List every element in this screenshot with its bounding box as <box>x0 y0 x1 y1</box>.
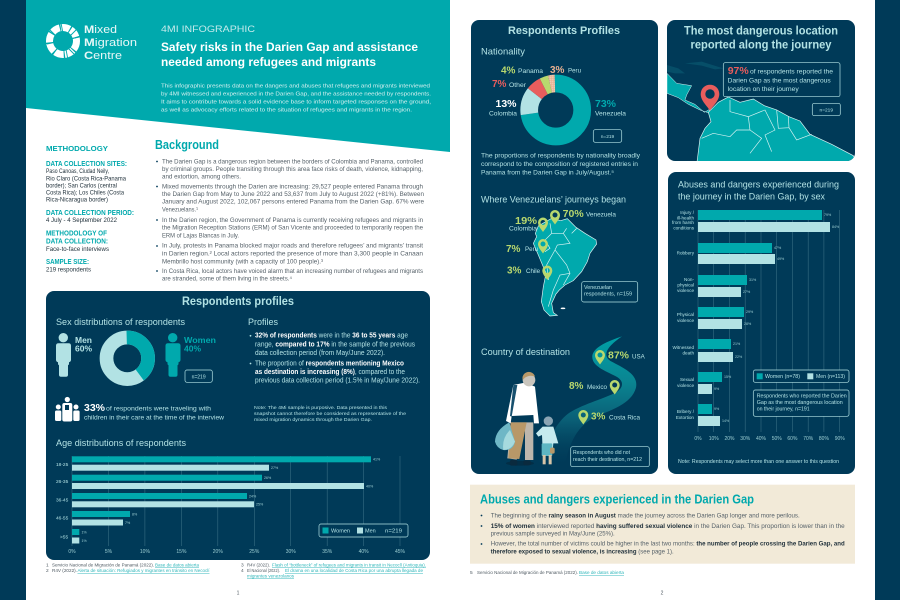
footnotes page 1: Alerta de situación: Refugiados y migrantes en tránsito en Necoclí <box>78 568 210 574</box>
methodology column: 219 respondents <box>46 268 91 274</box>
respondents note box <box>753 390 849 416</box>
age chart: 35% <box>322 549 333 555</box>
nationality <box>481 46 641 177</box>
callout: 97%: 97% <box>728 65 749 77</box>
age chart: 41% <box>373 458 381 462</box>
background section: In July, protests in Panama blocked major roads and therefore refugees’ and migrants’ transit <box>162 243 423 250</box>
age chart: 7% <box>125 521 131 525</box>
origin labels: 3% <box>507 265 522 276</box>
footnotes page 1: El drama en una localidad de Costa Rica por una abrupta llegada de <box>285 568 423 574</box>
title: Safety risks in the Darien Gap and assistance <box>161 42 418 54</box>
legend: Women (n=78) <box>765 374 800 380</box>
bar chart: Robbery <box>677 251 695 256</box>
nationality note: Panama from the Darien Gap in July/August.⁵ <box>481 170 614 177</box>
footnotes page 1: El Nacional (2022). <box>247 568 280 574</box>
background section: are stranded, some of them living in the streets.⁴ <box>162 276 292 283</box>
footnotes page 1: 1 <box>46 562 49 568</box>
destination labels: Mexico <box>587 384 608 391</box>
heading: Abuses and dangers experienced during <box>678 179 839 190</box>
bar chart: 47% <box>774 246 782 250</box>
women label <box>184 335 216 354</box>
sex distribution: Sex distributions of respondents <box>56 317 185 328</box>
origin labels: Venezuela <box>586 212 617 218</box>
bar chart: 27% <box>743 290 751 294</box>
legend <box>753 370 849 382</box>
road illustration <box>537 336 636 465</box>
destination labels: 87% <box>608 350 629 362</box>
children statistic <box>84 402 224 422</box>
bar chart: violence <box>677 288 694 293</box>
bar chart: 15% <box>724 375 732 379</box>
bar chart: 29% <box>746 310 754 314</box>
background section: Membrillo host community (with a capacity of 100 people).³ <box>162 258 323 265</box>
age chart: 18-25 <box>56 462 69 468</box>
children statistic: 33% <box>84 402 106 414</box>
age chart: Age distributions of respondents <box>56 438 186 449</box>
bar chart: 60% <box>787 436 798 442</box>
chart legend: Women <box>331 528 350 534</box>
age chart: 24% <box>249 494 257 498</box>
background section: Venezuelans.¹ <box>162 207 198 214</box>
bar chart: 9% <box>714 387 720 391</box>
profiles text: range, compared to 17% in the sample of the previous <box>255 341 415 348</box>
footnotes page 1: Servicio Nacional de Migración de Panamá (2022). <box>52 562 154 568</box>
bar chart: 14% <box>722 419 730 423</box>
bar chart: from harsh <box>672 220 694 225</box>
callout: 97%: Darien Gap as the most dangerous <box>728 77 831 84</box>
logo: Mixed Migration Centre: Mixed <box>84 24 117 36</box>
background section: In the Darien region, the Government of Panama is currently receiving refugees and migrants in <box>162 217 423 224</box>
destination labels: Costa Rica <box>609 415 641 422</box>
respondents note box: on their journey, n=191 <box>757 407 810 413</box>
journeys map: Where Venezuelans’ journeys began <box>481 194 626 205</box>
age chart: 40% <box>366 484 374 488</box>
intro text: It aims to contribute towards a solid evidence base to inform targeted responses on the ground, <box>161 100 432 106</box>
map: South America <box>533 218 597 316</box>
bar chart: ill-health <box>677 215 694 220</box>
footnotes page 1: R4V (2022). <box>247 562 270 568</box>
donut: sex <box>107 338 148 379</box>
journeys map <box>481 194 638 316</box>
nationality: Panama <box>518 68 544 75</box>
bar chart: 10% <box>709 436 719 442</box>
destination labels <box>569 350 646 423</box>
background section <box>155 138 424 283</box>
destination: Country of destination <box>481 347 570 358</box>
origin labels <box>506 209 617 276</box>
map: Central and northern South America <box>667 62 857 165</box>
summary text: 15% of women interviewed reported having suffered sexual violence in the Darien Gap. This proportion is lower than in the <box>491 523 845 530</box>
heading: the journey in the Darien Gap, by sex <box>678 191 825 202</box>
bar chart: 49% <box>777 257 785 261</box>
footnotes page 1: R4V (2022). <box>52 568 77 574</box>
bar chart: physical <box>677 282 694 288</box>
sample size box <box>812 103 840 116</box>
bar chart: 9% <box>714 407 720 411</box>
bar chart: 90% <box>835 436 845 442</box>
destination labels: 3% <box>591 412 606 423</box>
title <box>161 42 418 69</box>
bar chart: conditions <box>673 225 695 230</box>
footnote page 2: 5 <box>470 570 473 576</box>
summary text: previous sample surveyed in May/June (25%). <box>491 531 615 538</box>
age chart: 1% <box>82 530 87 534</box>
bar chart: violence <box>677 318 694 323</box>
footnotes page 1 <box>46 562 426 580</box>
intro text: by 4MI witnessed and experienced in the Darien Gap, and the assistance needed by respondents. <box>161 92 431 98</box>
respondents box <box>582 282 638 302</box>
methodology column: Costa Rica); Los Chiles (Costa <box>46 190 125 196</box>
panel: most dangerous location <box>667 20 857 165</box>
summary text <box>491 512 845 556</box>
bar chart: 31% <box>749 278 757 282</box>
women label: 40% <box>184 344 201 354</box>
children statistic: children in their care at the time of the interview <box>84 415 224 422</box>
age chart: 25% <box>256 503 264 507</box>
heading: The most dangerous location <box>684 25 838 37</box>
origin labels: Colombia <box>509 226 538 233</box>
destination sample box: Respondents who did not <box>573 450 631 456</box>
methodology column: DATA COLLECTION: <box>46 238 108 246</box>
footnote page 2: Base de datos abierta <box>579 570 624 576</box>
background section: In Costa Rica, local actors have voiced alarm that an increasing number of refugees and migrants <box>162 268 423 275</box>
bar chart: 22% <box>735 355 743 359</box>
methodology column: DATA COLLECTION SITES: <box>46 161 127 168</box>
methodology column: METHODOLOGY <box>46 144 108 153</box>
note: Note: Respondents may select more than one answer to this question <box>678 459 839 465</box>
methodology column: 4 July - 4 September 2022 <box>46 218 118 224</box>
background section: Mixed movements through the Darien are increasing: 29,527 people entered Panama through <box>162 183 423 190</box>
heading: Respondents Profiles <box>508 25 620 37</box>
men bars <box>72 465 364 544</box>
profiles text: 32% of respondents were in the 36 to 55 years age <box>255 333 408 340</box>
bar chart: 28% <box>744 322 752 326</box>
panel: respondents profiles (page 2) <box>471 20 658 474</box>
bar chart: Witnessed <box>673 345 694 350</box>
background section: the Darien Gap from May to June 2022 and 53,637 from July to August 2022 (+81%). Between <box>162 191 424 198</box>
profiles text: The proportion of respondents mentioning Mexico <box>255 360 404 367</box>
age chart: 10% <box>140 549 150 555</box>
background section: in Darien region.² Local actors reported the presence of more than 3,300 people in Canaan <box>162 250 423 257</box>
intro text <box>161 84 432 114</box>
age chart: 0% <box>68 549 76 555</box>
bar chart: death <box>682 350 694 356</box>
men label: Men <box>75 335 92 345</box>
eyebrow: 4MI INFOGRAPHIC <box>161 24 256 34</box>
age chart: 15% <box>176 549 187 555</box>
respondents box: respondents, n=159 <box>584 292 632 298</box>
methodology column: Rica-Nicaragua border) <box>46 198 108 204</box>
bar chart: 79% <box>824 213 832 217</box>
chart legend: Men <box>365 528 376 534</box>
sample size box: n=219 <box>192 374 206 380</box>
methodology column: border); San Carlos (central <box>46 184 117 190</box>
origin labels: 7% <box>506 244 521 255</box>
heading: Respondents profiles <box>182 296 294 308</box>
age chart: 30% <box>286 549 296 555</box>
women label: Women <box>184 335 216 345</box>
footnotes page 1: 2 <box>46 568 49 574</box>
callout: 97%: location on their journey <box>728 86 800 93</box>
destination <box>481 336 649 467</box>
nationality: 13% <box>496 99 517 110</box>
nationality note: The proportions of respondents by nationality broadly <box>481 153 641 160</box>
bar chart: Bribery / <box>677 409 695 414</box>
red pin: Darien Gap <box>701 85 719 111</box>
chart legend: n=219 <box>385 528 402 534</box>
nationality note <box>481 153 641 177</box>
bar chart: violence <box>677 383 694 388</box>
sample note: mixed migration dynamics through the Darien Gap. <box>254 417 372 423</box>
title: needed among refugees and migrants <box>161 57 376 69</box>
age chart: 45% <box>395 549 406 555</box>
origin labels: 19% <box>515 216 537 227</box>
background section: Background <box>155 138 219 152</box>
bar chart: 0% <box>694 436 702 442</box>
sample size box: n=219 <box>820 108 833 114</box>
heading: reported along the journey <box>690 39 832 51</box>
age chart: 36-45 <box>56 498 69 504</box>
men label: 60% <box>75 344 92 354</box>
footnotes page 1: migrantes venezolanos <box>247 574 295 580</box>
age chart: >55 <box>60 534 68 540</box>
respondents note box: Gap as the most dangerous location <box>757 400 843 406</box>
bar chart: 20% <box>724 436 735 442</box>
nationality: 7% <box>492 79 507 90</box>
origin labels: 70% <box>563 209 584 220</box>
icon: family with children <box>55 397 80 422</box>
intro text: as well as advocacy efforts related to the situation of refugees and migrants in the region. <box>161 108 413 114</box>
sample note <box>254 405 406 423</box>
summary text: therefore exposed to sexual violence, is increasing (see page 1). <box>491 549 674 556</box>
age chart: 26% <box>264 476 272 480</box>
bar chart: Extortion <box>676 415 694 420</box>
age chart: 20% <box>213 549 223 555</box>
age chart: 40% <box>359 549 369 555</box>
legend: Men (n=113) <box>816 374 845 380</box>
methodology column: Face-to-face interviews <box>46 247 109 253</box>
methodology column: METHODOLOGY OF <box>46 230 108 238</box>
origin labels: Chile <box>526 268 541 275</box>
chart legend <box>319 524 408 537</box>
heading: Abuses and dangers experienced in the Darien Gap <box>480 492 754 506</box>
children statistic: of respondents were traveling with <box>106 406 211 412</box>
icon: woman <box>166 333 180 377</box>
sex distribution <box>56 317 216 382</box>
bar chart: 21% <box>733 342 741 346</box>
age chart: 5% <box>105 549 113 555</box>
sample size box: n=219 <box>601 134 615 140</box>
nationality note: correspond to the composition of registered entries in <box>481 161 638 168</box>
background section: the Migration Reception Stations (ERM) of San Vicente and proceeded to temporarily reopen the <box>162 225 423 232</box>
nationality: 73% <box>595 99 616 110</box>
background section: ERM of Lajas Blancas in July. <box>162 233 239 240</box>
destination labels: USA <box>632 354 646 360</box>
footnotes page 1: 3 <box>241 562 244 568</box>
bar chart: 70% <box>803 436 814 442</box>
respondents box: Venezuelan <box>584 285 612 291</box>
heading <box>684 25 838 51</box>
bar chart: 30% <box>740 436 751 442</box>
bar chart: 50% <box>772 436 782 442</box>
summary text: However, the total number of victims could be higher in the last two months: the number of people crossing the Darien Gap, and <box>491 541 845 548</box>
illustration: adult and child <box>495 372 558 466</box>
footnote page 2 <box>470 570 624 576</box>
nationality: Nationality <box>481 46 525 57</box>
women bars <box>72 456 371 535</box>
bar chart <box>672 210 845 442</box>
bar chart: Non- <box>684 277 694 282</box>
age chart: 1% <box>82 539 87 543</box>
nationality: 3% <box>550 65 565 76</box>
footnote page 2: Servicio Nacional de Migración de Panamá (2022). <box>477 570 578 576</box>
profiles text: as destination is increasing (8%), compared to the <box>255 369 405 376</box>
logo: Mixed Migration Centre: Centre <box>84 50 122 62</box>
age chart: 25% <box>249 549 260 555</box>
footnotes page 1: 4 <box>241 568 244 574</box>
bar chart: Injury / <box>680 210 695 215</box>
donut: nationality <box>529 84 582 136</box>
pins: journey origins <box>538 210 560 280</box>
profiles text: previous data collection period (1.5% in May/June 2022). <box>255 378 420 385</box>
destination labels: 8% <box>569 381 584 392</box>
destination sample box: reach their destination, n=212 <box>573 457 642 463</box>
icon: man <box>56 333 71 377</box>
sample size box <box>185 370 212 382</box>
age chart <box>56 438 408 555</box>
nationality: Colombia <box>489 111 518 118</box>
background section: and extortion, among others. <box>162 174 241 181</box>
profiles text <box>248 317 420 385</box>
panel: respondents profiles (page 1) <box>46 291 430 560</box>
bar chart: 80% <box>819 436 829 442</box>
background section: January and August 2022, 102,067 persons entered Panama from the Darien Gap. 67% were <box>162 199 424 206</box>
header banner <box>26 0 450 152</box>
logo: Mixed Migration Centre <box>47 23 137 62</box>
pins: destinations <box>578 350 620 424</box>
age chart: 26-35 <box>56 479 69 485</box>
nationality: Other <box>509 82 526 89</box>
callout: 97% <box>723 63 840 97</box>
respondents note box: Respondents who reported the Darien <box>757 394 847 400</box>
logo: Mixed Migration Centre: Migration <box>84 37 137 49</box>
methodology column: Rio Claro (Costa Rica-Panama <box>46 176 127 182</box>
bar chart: 40% <box>756 436 767 442</box>
men label <box>75 335 92 354</box>
background section: The Darien Gap is a dangerous region between the borders of Colombia and Panama, controlled <box>162 158 423 165</box>
profiles text: Profiles <box>248 317 278 328</box>
age chart: 8% <box>132 512 138 516</box>
summary text: The beginning of the rainy season in August made the journey across the Darien Gap longer and more perilous. <box>491 512 800 519</box>
methodology column: SAMPLE SIZE: <box>46 259 89 266</box>
panel: abuses and dangers summary <box>470 485 855 564</box>
sample note: Note: The 4Mi sample is purposive. Data presented in this <box>254 405 388 411</box>
background section: by criminal groups. People transiting through this area face risks of death, violence, kidnapping, <box>162 166 423 173</box>
page number 1: 1 <box>237 590 240 596</box>
heading <box>678 179 839 202</box>
panel: abuses by sex <box>668 172 855 474</box>
nationality: 4% <box>501 65 516 76</box>
intro text: This infographic presents data on the dangers and abuses that refugees and migrants interviewed <box>161 84 430 90</box>
methodology column: Paso Canoas, Ciudad Neily, <box>46 169 109 175</box>
methodology column: DATA COLLECTION PERIOD: <box>46 210 134 217</box>
bar chart: 84% <box>832 225 840 229</box>
sample note: snapshot cannot therefore be considered as representative of the <box>254 411 406 417</box>
women bars <box>698 210 822 414</box>
men bars <box>698 222 830 426</box>
page number 2: 2 <box>661 590 664 596</box>
footnotes page 1: Base de datos abierta <box>155 562 199 568</box>
profiles text: data collection period (from May/June 2022). <box>255 350 385 357</box>
age chart: 46-55 <box>56 516 69 522</box>
origin labels: Peru <box>525 246 539 253</box>
nationality: Venezuela <box>595 111 627 118</box>
bar chart: Physical <box>677 312 694 317</box>
nationality: Peru <box>568 68 582 74</box>
bar chart: Sexual <box>680 377 694 382</box>
destination sample box <box>571 447 649 467</box>
age chart: 27% <box>271 466 279 470</box>
sample size box <box>593 130 622 142</box>
methodology column <box>46 144 134 274</box>
footnotes page 1: Flash of “bottleneck” of refugees and migrants in transit in Necoclí (Antioquia). <box>272 562 426 568</box>
callout: 97%: of respondents reported the <box>750 69 833 76</box>
